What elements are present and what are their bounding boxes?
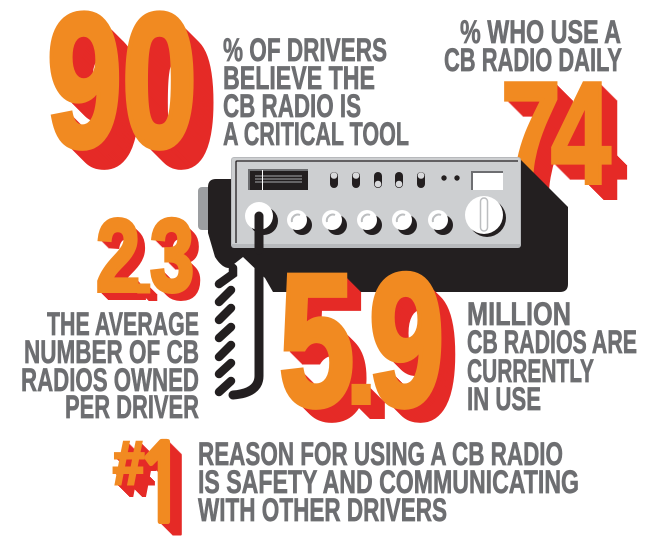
- caption: number one reason: [198, 436, 579, 528]
- toggle switches: [330, 172, 425, 188]
- microphone cord: [233, 216, 259, 395]
- radio bracket: [198, 187, 218, 230]
- big number: 2.3: 3: [150, 198, 194, 313]
- indicator lights: [441, 175, 460, 181]
- big number: 5.9: .: [346, 300, 377, 428]
- small knobs: [287, 210, 453, 235]
- caption: number one reason: WITH OTHER DRIVERS: [198, 492, 447, 528]
- caption: 90 percent: A CRITICAL TOOL: [223, 116, 409, 152]
- caption: 90 percent: BELIEVE THE: [223, 60, 375, 96]
- caption: 2.3 radios: NUMBER OF CB: [24, 334, 199, 370]
- caption: 5.9 million: CURRENTLY: [467, 353, 594, 389]
- caption: 5.9 million: MILLION: [467, 296, 571, 332]
- big number: 2.3: 2: [96, 198, 140, 313]
- caption: 90 percent: [223, 32, 409, 152]
- large dial: [465, 196, 506, 237]
- caption: 90 percent: CB RADIO IS: [223, 88, 361, 124]
- faceplate: [231, 157, 521, 248]
- big number: 74: 4: [550, 52, 610, 214]
- meter window: [471, 171, 503, 190]
- microphone socket: [245, 202, 278, 250]
- big number: #1: #: [113, 429, 145, 497]
- big number: 2.3: .: [135, 249, 152, 302]
- big number: 5.9: 9: [369, 235, 444, 445]
- caption: 74 percent: [444, 14, 622, 78]
- caption: 2.3 radios: THE AVERAGE: [47, 306, 199, 342]
- big number: 74: 7: [501, 52, 561, 214]
- coiled cord: [219, 268, 233, 392]
- big number: #1: 1: [134, 432, 190, 539]
- caption: 2.3 radios: RADIOS OWNED: [21, 362, 199, 398]
- caption: 2.3 radios: [21, 306, 199, 425]
- display window: [248, 169, 308, 190]
- caption: 2.3 radios: PER DRIVER: [65, 389, 199, 425]
- caption: 5.9 million: [467, 296, 637, 417]
- big number: 5.9: 5: [278, 235, 354, 445]
- caption: 5.9 million: IN USE: [467, 381, 541, 417]
- radio body: [208, 160, 568, 292]
- caption: 90 percent: % OF DRIVERS: [223, 32, 387, 68]
